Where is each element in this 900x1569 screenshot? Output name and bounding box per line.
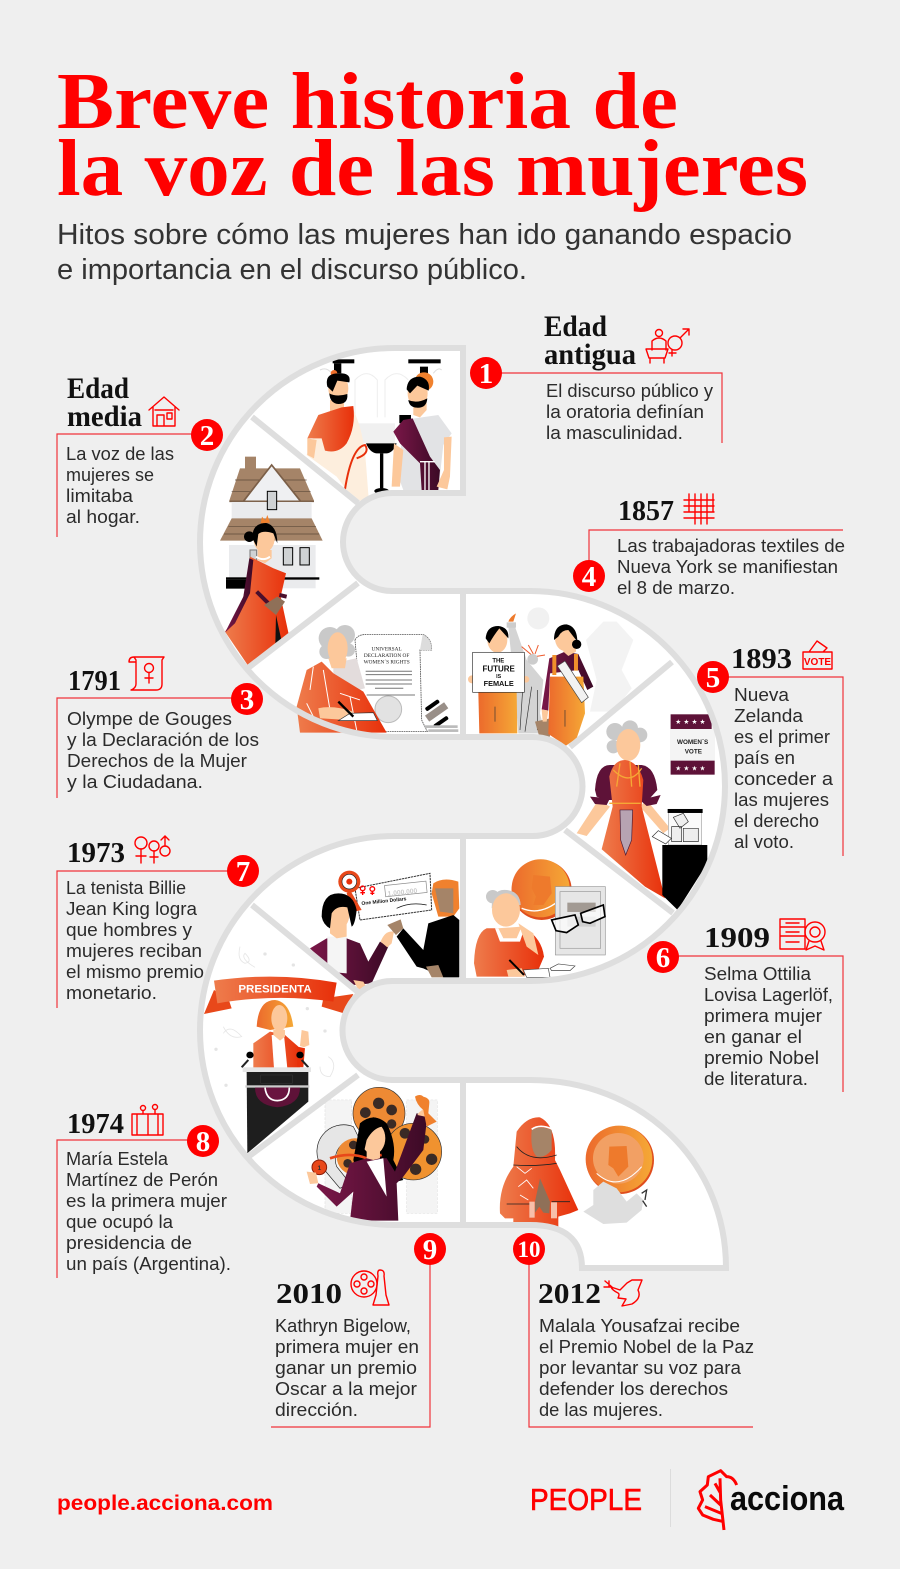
- callout 9: 2010: [271, 1233, 446, 1427]
- body text: Olympe de Gouges: [67, 709, 232, 729]
- body text: Kathryn Bigelow,: [275, 1316, 411, 1336]
- illustration: Billie Jean King with prize cheque: 1,000,000: [387, 888, 418, 898]
- illustration: Olympe de Gouges with declaration: [297, 625, 458, 733]
- marker 8: 8: [196, 1126, 210, 1158]
- icon: books and medal: [780, 919, 825, 950]
- body text: primera mujer: [704, 1006, 822, 1026]
- icon: scroll with female symbol: [129, 657, 164, 690]
- body text: el Premio Nobel de la Paz: [539, 1337, 754, 1357]
- body text: conceder a: [734, 769, 834, 789]
- callout 5: 1893: [697, 641, 843, 856]
- icon: film reel and trophy: [351, 1270, 389, 1305]
- heading: Edad antigua: [544, 310, 636, 371]
- heading: Edad media: Edad: [67, 372, 129, 405]
- website link: people.acciona.com: [57, 1492, 273, 1515]
- heading: 1791: 1791: [68, 665, 121, 697]
- body text: y la Ciudadana.: [67, 772, 203, 792]
- marker 4: [573, 560, 605, 593]
- body text: [66, 444, 174, 527]
- callout 3: 1791: [57, 657, 263, 798]
- body text: premio Nobel: [704, 1048, 819, 1068]
- marker 9: [414, 1233, 446, 1266]
- illustration: president at podium: [204, 947, 353, 1153]
- illustration: ancient orators: [307, 359, 452, 501]
- icon: house: [149, 397, 179, 426]
- body text: es la primera mujer: [66, 1191, 227, 1211]
- subtitle: e importancia en el discurso público.: [57, 254, 527, 286]
- body text: un país (Argentina).: [66, 1254, 231, 1274]
- body text: primera mujer en: [275, 1337, 419, 1357]
- illustration: Kathryn Bigelow with film reels: [307, 1087, 442, 1221]
- illustration: woman voting in New Zealand: ★ ★ ★ ★: [675, 765, 706, 773]
- body text: [539, 1316, 754, 1420]
- callout 10: 2012: [513, 1233, 754, 1427]
- PEOPLE wordmark: PEOPLE: [530, 1482, 642, 1517]
- heading: Edad antigua: Edad: [544, 310, 607, 343]
- body text: Jean King logra: [66, 899, 198, 919]
- body text: presidencia de: [66, 1233, 192, 1253]
- body text: y la Declaración de los: [67, 730, 259, 750]
- title: la voz de las mujeres: [57, 125, 808, 213]
- illustration: Kathryn Bigelow with film reels: 1: [317, 1165, 321, 1172]
- body text: La voz de las: [66, 444, 174, 464]
- body text: que ocupó la: [66, 1212, 174, 1232]
- illustration: woman voting in New Zealand: VOTE: [685, 748, 702, 755]
- heading: 1893: 1893: [731, 643, 792, 675]
- heading: Edad antigua: antigua: [544, 338, 636, 371]
- marker 3: 3: [240, 684, 254, 716]
- S-shaped timeline panel: [200, 348, 726, 1268]
- icon: ballot box: VOTE: [804, 657, 831, 668]
- body text: [67, 709, 259, 792]
- illustration: textile workers: [468, 607, 633, 746]
- body text: monetario.: [66, 983, 157, 1003]
- illustration: Malala with Nobel medal and dove: [500, 1117, 654, 1227]
- marker 2: 2: [200, 420, 214, 452]
- body text: María Estela: [66, 1149, 169, 1169]
- heading: Edad media: [67, 372, 142, 433]
- body text: [275, 1316, 419, 1420]
- body text: la masculinidad.: [546, 423, 683, 443]
- callout 2: Edad media: [57, 372, 223, 537]
- marker 7: [227, 855, 259, 888]
- body text: de las mujeres.: [539, 1400, 663, 1420]
- callout 6: 1909: [647, 919, 843, 1092]
- body text: mujeres reciban: [66, 941, 202, 961]
- body text: [66, 878, 204, 1003]
- footer: [57, 1469, 845, 1530]
- marker 1: 1: [479, 358, 493, 390]
- body text: [617, 536, 845, 598]
- heading: 1974: 1974: [67, 1108, 124, 1140]
- body text: el mismo premio: [66, 962, 204, 982]
- heading: 1973: 1973: [67, 837, 125, 869]
- body text: es el primer: [734, 727, 830, 747]
- body text: El discurso público y: [546, 381, 713, 401]
- body text: limitaba: [66, 486, 134, 506]
- heading: 1909: 1909: [704, 922, 770, 954]
- panel outline and dividers: [200, 348, 726, 1268]
- body text: Selma Ottilia: [704, 964, 812, 984]
- heading: 2012: 2012: [538, 1278, 601, 1310]
- marker 5: [697, 661, 729, 694]
- heading: 1857: 1857: [618, 495, 674, 527]
- body text: defender los derechos: [539, 1379, 728, 1399]
- marker 5: 5: [706, 662, 720, 694]
- body text: al hogar.: [66, 507, 140, 527]
- marker 6: [647, 941, 679, 974]
- illustration: woman voting in New Zealand: [577, 714, 715, 910]
- marker 6: 6: [656, 942, 670, 974]
- illustration: Billie Jean King with prize cheque: [310, 871, 459, 990]
- marker 3: [231, 683, 263, 716]
- callout 1: Edad antigua: [470, 310, 722, 443]
- callout 8: 1974: [57, 1104, 231, 1278]
- callout 7: 1973: [57, 836, 259, 1008]
- marker 10: 10: [518, 1237, 540, 1262]
- icon: orator and gender symbols: [646, 329, 689, 363]
- acciona logo: acciona: [730, 1480, 845, 1518]
- illustration: Selma Lagerlöf with Nobel medal: [474, 859, 605, 977]
- title: Breve historia de: [57, 58, 678, 146]
- body text: Nueva York se manifiestan: [617, 557, 838, 577]
- title: [57, 58, 808, 213]
- heading: 2010: 2010: [276, 1278, 342, 1310]
- body text: Las trabajadoras textiles de: [617, 536, 845, 556]
- icon: ballot box: [803, 641, 832, 669]
- icon: peace dove: [604, 1280, 642, 1306]
- body text: Malala Yousafzai recibe: [539, 1316, 740, 1336]
- body text: dirección.: [275, 1400, 358, 1420]
- body text: al voto.: [734, 832, 794, 852]
- marker 9: 9: [423, 1234, 437, 1266]
- body text: Lovisa Lagerlöf,: [704, 985, 833, 1005]
- body text: en ganar el: [704, 1027, 802, 1047]
- body text: Nueva: [734, 685, 790, 705]
- illustration: Billie Jean King with prize cheque: One Million Dollars: [361, 896, 407, 907]
- body text: la oratoria definían: [546, 402, 704, 422]
- illustration: Olympe de Gouges with declaration: DECLARATION OF: [364, 653, 409, 659]
- illustration: textile workers: THE: [492, 659, 504, 665]
- body text: [546, 381, 713, 443]
- acciona logo: [698, 1471, 845, 1530]
- illustration: textile workers: IS: [496, 674, 502, 680]
- illustration: president at podium: PRESIDENTA: [238, 984, 312, 996]
- illustration: Olympe de Gouges with declaration: WOMEN´S RIGHTS: [364, 660, 410, 666]
- body text: [66, 1149, 231, 1274]
- illustration: textile workers: FUTURE: [482, 664, 516, 673]
- marker 7: 7: [236, 856, 250, 888]
- illustration: medieval woman and house: [220, 457, 323, 666]
- body text: Zelanda: [734, 706, 804, 726]
- body text: [704, 964, 833, 1089]
- subtitle: [57, 219, 792, 286]
- heading: Edad media: media: [67, 400, 142, 433]
- body text: Derechos de la Mujer: [67, 751, 247, 771]
- body text: [734, 685, 834, 852]
- body text: el 8 de marzo.: [617, 578, 735, 598]
- body text: mujeres se: [66, 465, 154, 485]
- body text: Martínez de Perón: [66, 1170, 218, 1190]
- body text: de literatura.: [704, 1069, 808, 1089]
- illustration: textile workers: FEMALE: [484, 679, 514, 688]
- body text: país en: [734, 748, 795, 768]
- marker 2: [191, 419, 223, 452]
- body text: que hombres y: [66, 920, 192, 940]
- icon: gender symbols: [135, 836, 170, 863]
- body text: Oscar a la mejor: [275, 1379, 417, 1399]
- body text: el derecho: [734, 811, 819, 831]
- body text: ganar un premio: [275, 1358, 417, 1378]
- subtitle: Hitos sobre cómo las mujeres han ido ganando espacio: [57, 219, 792, 251]
- body text: por levantar su voz para: [539, 1358, 742, 1378]
- illustration: Olympe de Gouges with declaration: UNIVERSAL: [372, 647, 402, 653]
- marker 4: 4: [582, 561, 596, 593]
- marker 1: [470, 357, 502, 390]
- icon: podium with microphones: [132, 1104, 163, 1135]
- illustration: woman voting in New Zealand: ★ ★ ★ ★: [675, 718, 706, 726]
- marker 10: [513, 1233, 545, 1265]
- body text: La tenista Billie: [66, 878, 186, 898]
- illustration: woman voting in New Zealand: WOMEN´S: [677, 739, 708, 746]
- icon: woven textile: [684, 494, 714, 524]
- callout 4: 1857: [573, 494, 845, 598]
- marker 8: [187, 1125, 219, 1158]
- body text: las mujeres: [734, 790, 829, 810]
